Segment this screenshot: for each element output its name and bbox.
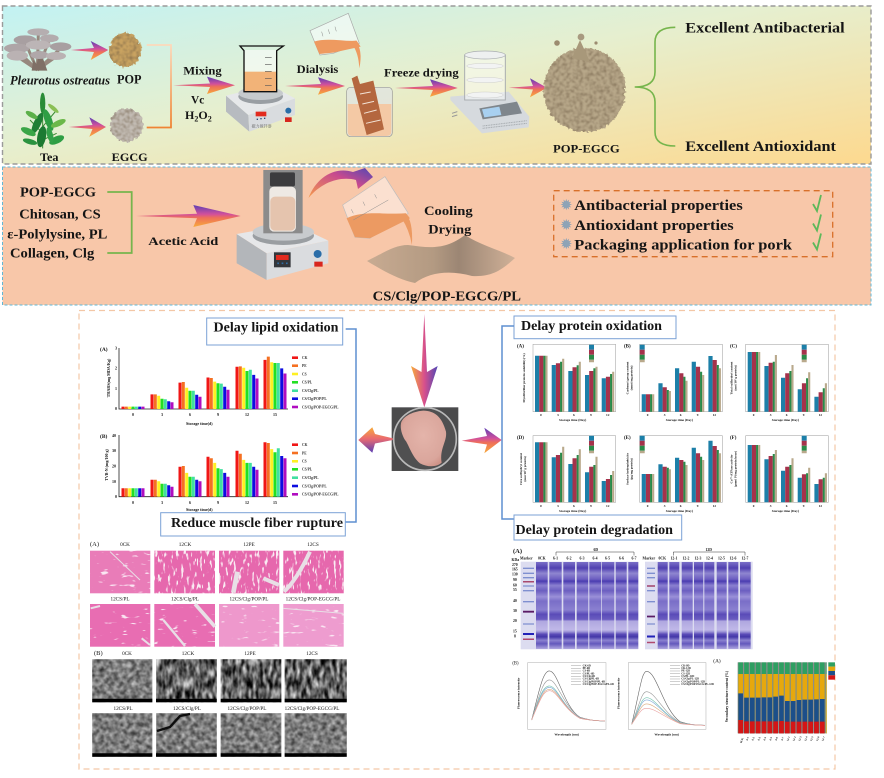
stacked bar chart: secondary structure: 12-2: [792, 735, 797, 742]
gel electrophoresis: 6-3: [580, 556, 585, 560]
text: Freeze drying: Freeze drying: [384, 66, 459, 80]
line chart: fluorescence 6D: [512, 661, 614, 736]
bar chart: total sulfhydryl content: (mol/10⁵ g protein): [734, 365, 738, 391]
line chart: fluorescence 6D: Fluorescence intensity: [516, 677, 520, 709]
bar chart: TVB-N: CK: [302, 443, 308, 447]
bar chart: Ca-ATPase activity: (F): [730, 436, 737, 441]
gel electrophoresis: 30: [513, 609, 517, 613]
micrographs: SEM: 12CK: [182, 651, 194, 657]
heading: Reduce muscle fiber rupture: Reduce muscle fiber rupture: [171, 516, 343, 531]
bar chart: myofibrillar protein solubility: 9: [590, 413, 592, 417]
arrow: curved to pouring beaker: [308, 168, 373, 198]
bar chart: TBARS: 3: [115, 346, 117, 350]
micrographs: H&E staining: 12PE: [243, 542, 255, 548]
gel electrophoresis: 0CK: [658, 556, 666, 560]
gel electrophoresis: 12-7: [742, 556, 749, 560]
gel electrophoresis: 12-4: [706, 556, 713, 560]
bar chart: carbonyl group content: (nmol/mg protein): [630, 366, 634, 390]
icon: freeze dryer: [450, 51, 529, 133]
bar chart: myofibrillar protein solubility: [517, 344, 616, 422]
heading: Delay protein oxidation: Delay protein oxidation: [521, 319, 662, 334]
bar chart: carbonyl group content: Carbonyl group content: [626, 361, 630, 394]
stacked bar chart: secondary structure: 0CK: [740, 737, 745, 744]
arrow: to POP-EGCG: [509, 78, 547, 97]
arrow: down to pork: [411, 314, 438, 407]
gel electrophoresis: 270: [512, 563, 518, 567]
text: Chitosan: Chitosan, CS: [19, 206, 101, 221]
icon: magnetic stirrer with beaker: [226, 46, 295, 132]
bar chart: total sulfhydryl content: 0: [753, 413, 755, 417]
bar chart: free sulfhydryl content: 9: [590, 504, 592, 508]
text: EGCG: EGCG: [112, 150, 148, 164]
bar chart: surface hydrophobicity: (μg/mg protein): [630, 458, 634, 480]
bar chart: TBARS: 9: [217, 412, 219, 417]
bar chart: carbonyl group content: (B): [624, 344, 631, 350]
micrographs: SEM: [92, 650, 347, 757]
gel electrophoresis: 6D: [594, 548, 598, 552]
connector: lipid to muscle: [343, 329, 356, 522]
bracket: orange join: [147, 45, 171, 128]
line chart: fluorescence 12D: CS-12D: [681, 672, 690, 675]
line chart: fluorescence 6D: CS-6D: [583, 670, 590, 673]
stacked bar chart: secondary structure: (A): [713, 657, 721, 664]
gel electrophoresis: 40: [513, 599, 517, 603]
icon: check 2: [813, 214, 821, 230]
callout: film properties: [554, 191, 833, 257]
bar chart: TVB-N: 15: [273, 500, 277, 505]
heading: Delay protein degradation: [514, 515, 682, 540]
bar chart: total sulfhydryl content: 6: [786, 413, 788, 417]
stacked bar chart: secondary structure: 6-4: [763, 736, 767, 741]
bar chart: carbonyl group content: 12: [713, 413, 716, 417]
stacked bar chart: secondary structure: 12-4: [804, 735, 809, 742]
line chart: fluorescence 6D: CS/Clg/PL-6D: [583, 678, 599, 681]
gel electrophoresis: [512, 548, 753, 649]
text: antioxidant properties: Antioxidant properties: [574, 218, 734, 234]
bar chart: TBARS: CS/Clg/POP/PL: [302, 397, 327, 401]
bar chart: TVB-N: TVB-N (mg/100 g): [104, 449, 109, 481]
line chart: fluorescence 12D: CK-0D: [681, 664, 690, 667]
bar chart: myofibrillar protein solubility: 0: [540, 413, 542, 417]
bar chart: carbonyl group content: 9: [697, 413, 699, 417]
micrographs: SEM: 12CS/Clg/PL: [173, 706, 201, 712]
gel electrophoresis: 12D: [706, 548, 712, 552]
bar chart: total sulfhydryl content: Total sulfhydryl content: [730, 361, 734, 394]
line chart: fluorescence 6D: CS/Clg-6D: [583, 675, 595, 678]
bar chart: TVB-N: [100, 433, 339, 512]
text: H2O2: 2: [208, 114, 212, 124]
micrographs: H&E staining: 12CK: [179, 542, 191, 548]
icon: tea plant: [20, 93, 67, 148]
micrographs: SEM: 12CS: [306, 651, 318, 657]
bar chart: surface hydrophobicity: 3: [664, 504, 666, 508]
gel electrophoresis: 6-6: [619, 556, 624, 560]
line chart: fluorescence 6D: PE-6D: [583, 667, 590, 670]
bar chart: free sulfhydryl content: 12: [606, 504, 610, 508]
micrographs: SEM: 0CK: [122, 651, 132, 657]
gel electrophoresis: KDa: [512, 558, 519, 562]
bar chart: Ca-ATPase activity: (μmol Pi/mg protein/hour): [734, 451, 738, 487]
stacked bar chart: secondary structure: [713, 657, 835, 744]
bar chart: TBARS: 6: [189, 412, 191, 417]
stacked bar chart: secondary structure: 12-6: [816, 735, 820, 742]
bar chart: surface hydrophobicity: 0: [647, 504, 649, 508]
stacked bar chart: secondary structure: 6-5: [769, 736, 773, 741]
text: Tea: Tea: [40, 150, 58, 164]
bar chart: TVB-N: CS: [302, 460, 307, 464]
bar chart: TBARS: 1: [115, 386, 117, 391]
micrographs: H&E staining: (A): [90, 541, 99, 548]
gel electrophoresis: 12-5: [718, 556, 725, 560]
text: Acetic Acid: Acetic Acid: [148, 234, 219, 248]
bar chart: TVB-N: (B): [100, 433, 108, 440]
gel electrophoresis: 6-1: [553, 556, 558, 560]
gel electrophoresis: Marker: [642, 556, 655, 560]
text: Excellent Antibacterial: Excellent Antibacterial: [685, 20, 845, 36]
bar chart: Ca-ATPase activity: 12: [819, 504, 822, 508]
text: Polylysine: ε-Polylysine, PL: [7, 226, 107, 241]
gel electrophoresis: 55: [513, 588, 517, 592]
arrow: tea to EGCG: [69, 117, 106, 137]
gel electrophoresis: 12-3: [694, 556, 702, 560]
bar chart: Ca-ATPase activity: 9: [803, 504, 805, 508]
bar chart: free sulfhydryl content: (mol/10⁵ g protein): [523, 456, 527, 482]
bar chart: Ca-ATPase activity: 3: [770, 504, 772, 508]
panel: pork application results: [79, 310, 835, 769]
line chart: fluorescence 12D: Fluorescence intensity: [616, 677, 620, 709]
arrow: right from pork: [462, 428, 502, 453]
bar chart: free sulfhydryl content: 0: [540, 504, 542, 508]
bar chart: TVB-N: Storage time(d): [186, 507, 213, 512]
bar chart: free sulfhydryl content: Free sulfhydryl content: [519, 452, 523, 485]
icon: dialysis beaker with bag: [347, 76, 392, 137]
bar chart: total sulfhydryl content: 9: [803, 413, 805, 417]
stacked bar chart: secondary structure: 12-5: [810, 735, 814, 742]
micrographs: H&E staining: 12CS: [307, 542, 319, 548]
bar chart: Ca-ATPase activity: 6: [786, 504, 788, 508]
heading: Delay protein degradation: Delay protein degradation: [516, 523, 673, 538]
gel electrophoresis: 15: [513, 630, 517, 634]
line chart: fluorescence 6D: CS/Clg/POP/PL-6D: [583, 680, 605, 683]
text: POP: POP: [117, 72, 142, 86]
bar chart: myofibrillar protein solubility: Myofibrillar protein solubility(%): [522, 353, 526, 403]
bar chart: Ca-ATPase activity: Storage time (Day): [772, 509, 799, 513]
stacked bar chart: secondary structure: 6-2: [751, 736, 756, 741]
bar chart: TVB-N: 40: [112, 433, 116, 438]
icon: pouring beaker: [310, 13, 361, 68]
bar chart: TBARS: 15: [273, 412, 277, 417]
text: Collagen: Collagen, Clg: [10, 245, 95, 260]
line chart: fluorescence 6D: Wavelength (nm): [554, 732, 579, 736]
bar chart: myofibrillar protein solubility: 6: [573, 413, 575, 417]
stacked bar chart: secondary structure: Secondary structure content (%): [725, 670, 729, 722]
text: H2O2: H: [185, 108, 194, 122]
icon: EGCG powder: [110, 108, 143, 142]
stacked bar chart: secondary structure: 12-3: [798, 735, 803, 742]
bar chart: TBARS: CK: [302, 356, 308, 360]
icon: POP-EGCG powder: [544, 34, 626, 132]
gel electrophoresis: 20: [513, 619, 517, 623]
gel electrophoresis: 90: [513, 578, 517, 582]
bar chart: total sulfhydryl content: (C): [730, 344, 737, 350]
arrow: acetic acid: [136, 205, 241, 227]
stacked bar chart: secondary structure: 12-7: [821, 735, 826, 742]
bar chart: myofibrillar protein solubility: 12: [606, 413, 610, 417]
gel electrophoresis: 6-7: [632, 556, 637, 560]
micrographs: H&E staining: 12CS/PL: [110, 596, 130, 602]
arrow: mixing: [173, 77, 235, 94]
micrographs: H&E staining: 0CK: [120, 542, 130, 548]
bar chart: TVB-N: 10: [112, 479, 116, 484]
stacked bar chart: secondary structure: 6-3: [757, 736, 762, 741]
bar chart: myofibrillar protein solubility: (A): [517, 344, 524, 350]
image: pork in dish: [392, 407, 458, 471]
text: Vc: Vc: [191, 92, 205, 106]
bar chart: surface hydrophobicity: 12: [713, 504, 716, 508]
bar chart: TVB-N: 30: [112, 448, 116, 453]
bar chart: Ca-ATPase activity: Ca²⁺-ATPase activity: [730, 454, 734, 483]
text: POP-EGCG label: POP-EGCG: [553, 144, 620, 156]
bar chart: TVB-N: 12: [245, 500, 249, 505]
icon: oyster mushroom: [4, 28, 71, 71]
micrographs: SEM: 12CS/Clg/POP-EGCG/PL: [285, 706, 339, 712]
bar chart: TBARS: 12: [245, 412, 249, 417]
connector: protein oxidation to degradation: [502, 326, 514, 519]
gel electrophoresis: Marker: [520, 556, 533, 560]
line chart: fluorescence 12D: CS/PL-12D: [681, 675, 694, 678]
icon: pouring beaker 2: [343, 177, 412, 245]
bar chart: carbonyl group content: 6: [680, 413, 682, 417]
line chart: fluorescence 12D: Wavelength (nm): [654, 732, 679, 736]
line chart: fluorescence 12D: PE-12D: [681, 670, 690, 673]
bar chart: carbonyl group content: [624, 344, 722, 422]
line chart: fluorescence 6D: (B): [512, 661, 519, 666]
bar chart: TBARS: 3: [161, 412, 163, 417]
bar chart: surface hydrophobicity: [624, 436, 722, 513]
gel electrophoresis: 6-2: [566, 556, 572, 560]
bar chart: TBARS: CS: [302, 372, 307, 376]
icon: star bullet 3: ✹: [560, 235, 573, 253]
bar chart: TBARS: 2: [115, 366, 117, 370]
micrographs: H&E staining: 12CS/Clg/POP/PL: [230, 596, 268, 602]
bar chart: total sulfhydryl content: Storage time (Day): [772, 418, 799, 422]
icon: star bullet 2: ✹: [560, 216, 573, 234]
line chart: fluorescence 12D: CS/Clg/POP-EGCG/PL-12D: [681, 683, 714, 686]
micrographs: SEM: (B): [94, 650, 103, 657]
arrow: dialysis: [285, 77, 345, 95]
bracket: green brace: [635, 27, 675, 146]
bar chart: TVB-N: CS/PL: [302, 468, 313, 472]
bar chart: myofibrillar protein solubility: Storage time (Day): [559, 418, 586, 422]
bar chart: free sulfhydryl content: 6: [573, 504, 575, 508]
arrow: mushroom to POP: [71, 41, 108, 60]
gel electrophoresis: (A): [513, 548, 522, 555]
micrographs: SEM: 12CS/PL: [113, 706, 133, 712]
bar chart: TBARS: 0: [115, 406, 117, 411]
heading: Delay lipid oxidation: Delay lipid oxidation: [214, 320, 339, 336]
bar chart: TBARS: (A): [100, 346, 108, 353]
bar chart: myofibrillar protein solubility: 3: [557, 413, 559, 417]
line chart: fluorescence 6D: CS/Clg/POP-EGCG/PL-6D: [583, 683, 614, 686]
gel electrophoresis: 130: [512, 572, 518, 576]
text: Mixing: Mixing: [183, 64, 222, 78]
bar chart: TVB-N: 0: [132, 500, 134, 505]
bar chart: total sulfhydryl content: 3: [770, 413, 772, 417]
heading: Delay protein oxidation: [514, 316, 676, 339]
text: H2O2: 2: [194, 114, 198, 124]
bar chart: carbonyl group content: Storage time (Day): [666, 418, 693, 422]
micrographs: SEM: 12PE: [244, 651, 256, 657]
bar chart: TVB-N: PE: [302, 451, 307, 455]
line chart: fluorescence 12D: CS/Clg/POP/PL-12D: [681, 680, 705, 683]
line chart: fluorescence 12D: [616, 663, 714, 736]
gel electrophoresis: 12-1: [670, 556, 678, 560]
bar chart: carbonyl group content: 0: [647, 413, 649, 417]
stacked bar chart: secondary structure: 6-1: [746, 736, 750, 741]
bar chart: Ca-ATPase activity: 0: [753, 504, 755, 508]
panel: POP-EGCG preparation: [2, 6, 871, 164]
line chart: fluorescence 12D: CS/Clg/PL-12D: [681, 678, 699, 681]
bar chart: total sulfhydryl content: 12: [819, 413, 822, 417]
text: antibacterial properties: Antibacterial properties: [574, 198, 743, 214]
gel electrophoresis: 6-4: [592, 556, 598, 560]
bar chart: TVB-N: CS/Clg/POP-EGCG/PL: [302, 493, 339, 497]
micrographs: H&E staining: [90, 541, 344, 647]
bar chart: total sulfhydryl content: [730, 344, 828, 422]
gel electrophoresis: 12-2: [682, 556, 690, 560]
bar chart: TVB-N: CS/Clg/PL: [302, 476, 319, 480]
bar chart: TBARS: PE: [302, 364, 307, 368]
gel electrophoresis: 6-5: [605, 556, 610, 560]
bar chart: surface hydrophobicity: Surface hydrophobicity: [626, 453, 630, 485]
bar chart: TBARS: CS/Clg/POP-EGCG/PL: [302, 405, 339, 409]
arrow: freeze drying: [395, 79, 458, 97]
text: Excellent Antioxidant: Excellent Antioxidant: [685, 139, 836, 155]
bar chart: free sulfhydryl content: (D): [517, 436, 524, 441]
stacked bar chart: secondary structure: 6-6: [775, 736, 779, 741]
icon: film sheet: [367, 235, 515, 283]
bar chart: Ca-ATPase activity: [730, 436, 828, 513]
bar chart: TVB-N: 0: [115, 494, 117, 499]
bar chart: TBARS: CS/PL: [302, 381, 313, 385]
gel electrophoresis: 165: [512, 568, 518, 572]
bar chart: TBARS: THARS(mg MDA/Kg): [106, 358, 111, 397]
bar chart: carbonyl group content: 3: [664, 413, 666, 417]
text: Dialysis: Dialysis: [297, 62, 339, 76]
bar chart: surface hydrophobicity: 6: [680, 504, 682, 508]
text: film name: CS/Clg/POP-EGCG/PL: [373, 289, 521, 304]
gel electrophoresis: 0CK: [538, 556, 546, 560]
bar chart: free sulfhydryl content: 3: [557, 504, 559, 508]
bar chart: free sulfhydryl content: Storage time (Day): [559, 509, 586, 513]
icon: check 1: [813, 195, 821, 211]
bar chart: surface hydrophobicity: Storage time (Day): [666, 509, 693, 513]
line chart: fluorescence 6D: CK-6D: [583, 664, 591, 667]
stacked bar chart: secondary structure: 6-7: [781, 736, 785, 741]
line chart: fluorescence 6D: CS/PL-6D: [583, 672, 594, 675]
text: Drying: Drying: [428, 222, 472, 236]
icon: magnetic stirrer with beaker: 磁力搅拌器: [252, 122, 272, 128]
micrographs: H&E staining: 12CS/Clg/PL: [171, 596, 199, 602]
icon: stirrer with vial: [237, 170, 328, 280]
gel electrophoresis: 8: [514, 634, 516, 638]
arrow: left from pork: [358, 427, 393, 453]
gel electrophoresis: 60: [513, 584, 517, 588]
icon: check 3: [813, 234, 821, 250]
bar chart: TVB-N: 3: [161, 500, 163, 505]
bar chart: TBARS: 0: [132, 412, 134, 417]
bar chart: TBARS: Storage time(d): [186, 421, 213, 426]
bar chart: TVB-N: 20: [112, 464, 116, 468]
bar chart: TVB-N: 6: [189, 500, 191, 505]
icon: POP powder: [109, 33, 141, 67]
heading: Delay lipid oxidation: [207, 318, 343, 345]
stacked bar chart: secondary structure: 12-1: [786, 735, 791, 742]
bar chart: surface hydrophobicity: (E): [624, 436, 631, 441]
text: Cooling: Cooling: [424, 204, 474, 218]
text: POP-EGCG ingredient: POP-EGCG: [20, 185, 97, 200]
line chart: fluorescence 12D: CK-12D: [681, 667, 691, 670]
micrographs: SEM: 12CS/Clg/POP/PL: [228, 706, 266, 712]
panel: film preparation: [2, 167, 871, 305]
heading: Reduce muscle fiber rupture: [161, 513, 345, 536]
bar chart: TVB-N: 9: [217, 500, 219, 505]
text: H2O2: O: [198, 108, 208, 122]
micrographs: H&E staining: 12CS/Clg/POP-EGCG/PL: [286, 596, 340, 602]
text: packaging application: Packaging application for pork: [574, 237, 793, 253]
bar chart: TBARS: CS/Clg/PL: [302, 389, 319, 393]
bar chart: TBARS: [100, 346, 339, 426]
bar chart: surface hydrophobicity: 9: [697, 504, 699, 508]
bar chart: free sulfhydryl content: [517, 436, 616, 513]
bar chart: TVB-N: CS/Clg/POP/PL: [302, 484, 327, 488]
text: Pleurotus ostreatus: Pleurotus ostreatus: [10, 74, 110, 88]
bracket: green ingredients: [107, 192, 132, 253]
icon: star bullet 1: ✹: [560, 196, 573, 214]
gel electrophoresis: 12-6: [730, 556, 737, 560]
